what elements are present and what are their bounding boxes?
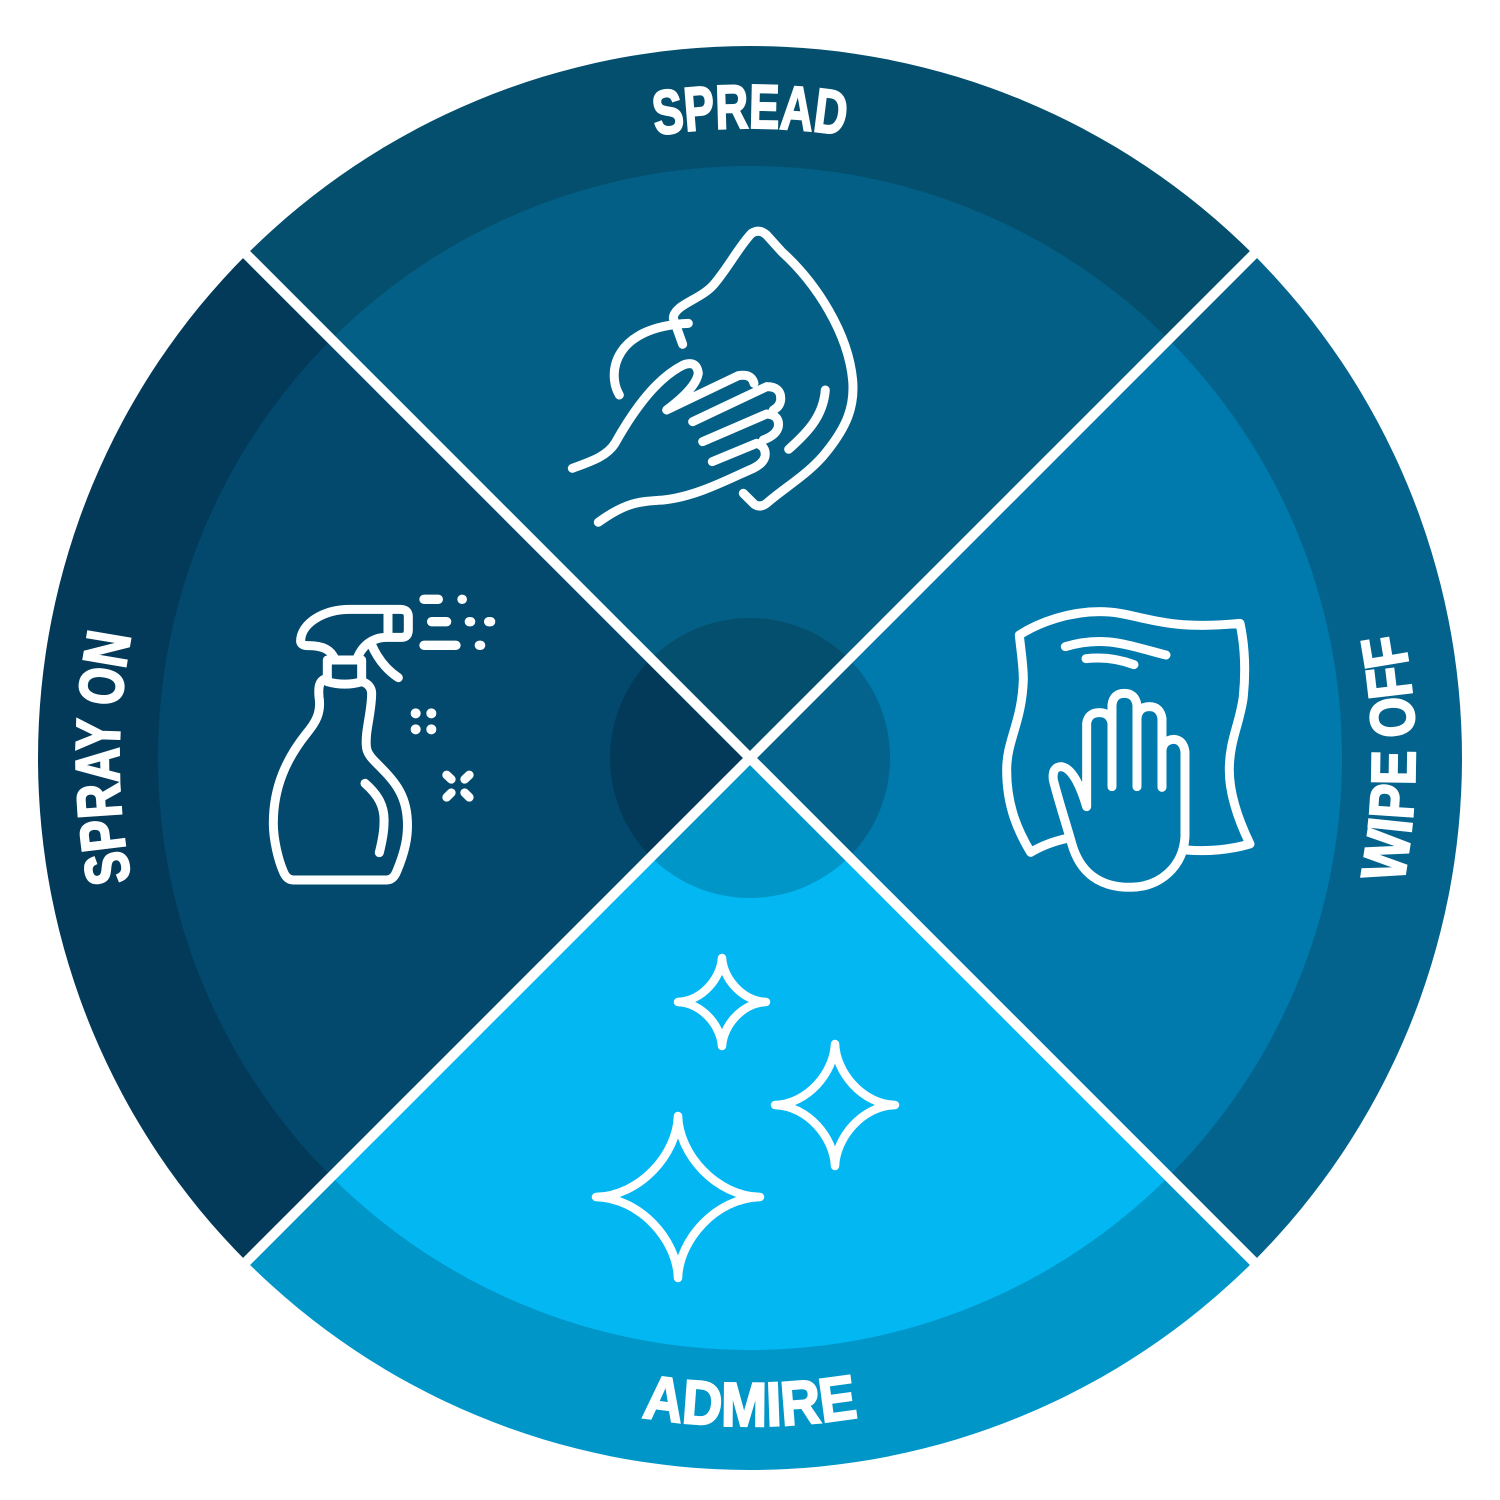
panel: spray on quadrant	[38, 258, 743, 1258]
panel: wipe off quadrant	[757, 258, 1462, 1258]
heading: spread: SPREAD	[653, 84, 847, 135]
panel: admire quadrant	[250, 765, 1250, 1470]
panel: spread quadrant	[250, 46, 1250, 751]
small sparkle	[678, 958, 766, 1046]
quadrant dividers	[240, 248, 1260, 1268]
heading: admire: ADMIRE	[641, 1374, 858, 1428]
medium sparkle	[775, 1044, 895, 1166]
heading: spray on: SPRAY ON	[75, 630, 132, 884]
icon: hand spreading with cloth	[572, 231, 853, 522]
icon: sparkles	[596, 958, 895, 1278]
icon: hand wiping cloth	[1007, 612, 1250, 887]
icon: spray bottle	[273, 599, 491, 880]
large sparkle	[596, 1116, 760, 1278]
heading: wipe off: WIPE OFF	[1360, 636, 1416, 878]
